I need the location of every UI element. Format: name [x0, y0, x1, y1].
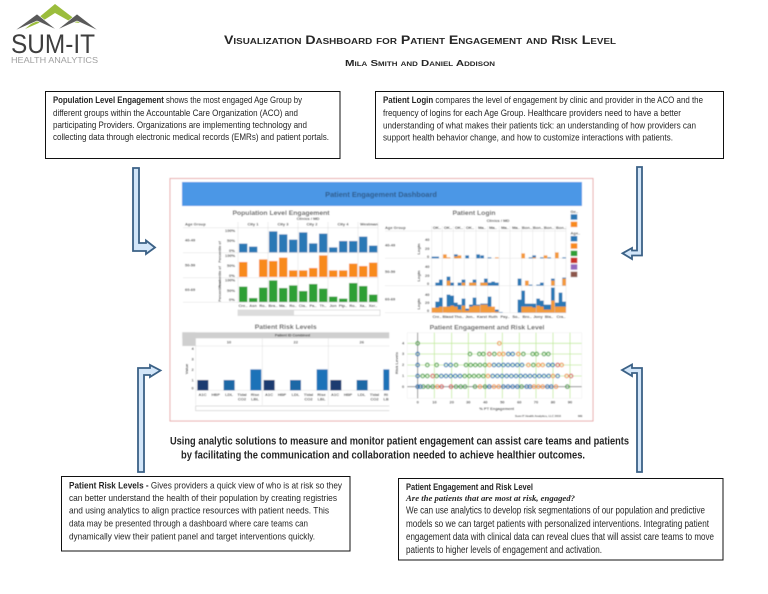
chart: patient risk levels: 22 [293, 340, 299, 345]
chart: patient risk levels: Rise [317, 392, 326, 397]
chart: patient engagement and risk level scatter: 70 [534, 400, 539, 404]
chart: patient engagement and risk level scatter: 80 [551, 400, 556, 404]
chart: patient login: Bon.. [556, 225, 566, 230]
chart: patient login: 0 [427, 281, 430, 286]
chart: patient risk levels: HBP [211, 392, 220, 397]
dashboard header banner [182, 182, 582, 206]
chart: population level engagement: Ma.. [279, 303, 287, 308]
chart: population level engagement: Cre.. [239, 303, 247, 308]
chart: population level engagement: Ro.. [289, 303, 297, 308]
legend: gender and age group: Age.. [570, 230, 580, 236]
panel: patient risk levels text: can better understand the health of their population by creating registries [69, 493, 337, 503]
panel: patient login text: support health behavior change, and how to customize interactions with patients. [383, 132, 673, 142]
chart: patient login: Karst [477, 314, 488, 319]
chart: patient login: 40 [425, 237, 430, 242]
chart: patient engagement and risk level scatter [394, 324, 582, 418]
chart: patient engagement and risk level scatter: 40 [483, 400, 488, 404]
chart: population level engagement: Pa.. [309, 303, 317, 308]
chart: patient login: 0 [427, 308, 430, 313]
chart: patient login: Bla.. [545, 314, 553, 319]
chart: patient login: 20 [425, 300, 430, 305]
callout: central statement: Using analytic solutions to measure and monitor patient engagement can assist care teams and patients [170, 436, 629, 448]
panel: patient login text [376, 92, 724, 158]
chart: patient risk levels: A1C [331, 392, 339, 397]
chart: population level engagement: Bra.. [269, 303, 277, 308]
chart: patient risk levels: A1C [265, 392, 273, 397]
chart: patient login: Clinics / MD [487, 218, 509, 223]
chart: population level engagement: 0% [229, 248, 235, 253]
chart: patient login: Bon.. [544, 225, 554, 230]
chart: patient login: Tho.. [454, 314, 464, 319]
chart: population level engagement: Xer.. [369, 303, 377, 308]
chart: patient login: OK.. [455, 225, 463, 230]
chart: patient engagement and risk level scatter: 2 [402, 362, 405, 367]
panel: patient engagement and risk level text [398, 478, 723, 560]
chart: patient engagement and risk level scatter: MB [578, 414, 582, 418]
chart: patient risk levels: CO2 [304, 396, 313, 402]
panel: patient risk levels text [62, 476, 350, 551]
chart: population level engagement: Jon [329, 303, 337, 308]
legend: gender and age group: Ge.. [570, 209, 578, 214]
chart: population level engagement: City 2 [307, 222, 318, 226]
chart: patient login: So.. [512, 314, 520, 319]
callout: central statement: by facilitating the communication and collaboration needed to achieve healthier outcomes. [181, 450, 585, 462]
chart: patient engagement and risk level scatter: 50 [500, 400, 505, 404]
chart: population level engagement: Pip.. [339, 303, 347, 308]
chart: population level engagement: Cla.. [299, 303, 307, 308]
panel: population level engagement text: different groups within the Accountable Care Organization (ACO) and [53, 108, 298, 118]
chart: population level engagement: 50-59 [185, 262, 196, 268]
chart: patient login: 40-49 [385, 242, 396, 248]
logo: Sum-It Health Analytics: SUM-IT [11, 29, 95, 59]
chart: patient engagement and risk level scatter: 0 [402, 384, 405, 389]
panel: patient engagement and risk level text: Patient Engagement and Risk Level [406, 482, 533, 492]
panel: patient risk levels text: data may be presented through a dashboard where care teams can [69, 518, 308, 528]
chart: patient risk levels: 3 [192, 356, 194, 362]
panel: population level engagement text: collecting data through electronic medical records (EMRs) and patient portals. [53, 132, 329, 142]
logo: Sum-It Health Analytics: HEALTH ANALYTICS [11, 55, 98, 65]
panel: patient risk levels text: dynamically view their patient panel and target interventions quickly. [69, 532, 315, 542]
authors: Mila Smith and Daniel Addison [345, 58, 495, 68]
chart: patient engagement and risk level scatter: Sum-IT Health Analytics, LLC 2016 [515, 414, 561, 418]
chart: population level engagement: City 4 [338, 222, 349, 226]
chart: patient risk levels: Ri [384, 392, 388, 397]
panel: patient engagement and risk level text: We can use analytics to develop risk segmentations of our population and predictive [406, 506, 705, 516]
chart: patient engagement and risk level scatter: 4 [402, 340, 405, 346]
chart: patient risk levels: Tidal [304, 392, 313, 397]
chart: population level engagement: 40-49 [185, 238, 196, 242]
panel: population level engagement text: Population Level Engagement shows the most engaged Age Group by [53, 95, 302, 105]
chart: population level engagement: Age Group [185, 222, 206, 226]
chart: patient risk levels: LDL [225, 392, 233, 397]
chart: population level engagement: 50% [227, 238, 235, 243]
chart: patient risk levels: HBP [344, 392, 353, 397]
chart: patient risk levels: LDL [292, 392, 300, 397]
chart: patient login: Cre.. [433, 314, 441, 319]
chart: patient engagement and risk level scatter: 1 [402, 373, 405, 378]
chart: patient risk levels: LBL [251, 396, 259, 402]
dashboard header banner: Patient Engagement Dashboard [325, 190, 437, 199]
chart: patient engagement and risk level scatter: % PT Engagement [479, 406, 515, 411]
chart: patient login: Ma.. [501, 225, 509, 230]
chart: patient engagement and risk level scatter: 0 [417, 400, 420, 404]
panel: population level engagement text: participating Providers. Organizations are implementing technology and [53, 120, 307, 130]
chart: patient login: 0 [427, 254, 430, 259]
chart: population level engagement: Clinics / MD [297, 216, 319, 221]
chart: patient login: 20 [425, 273, 430, 278]
chart: population level engagement: 100% [225, 253, 236, 258]
chart: patient login: Ma.. [489, 225, 497, 230]
chart: patient risk levels: Patient ID Combined [275, 334, 310, 338]
chart: population level engagement: Asn [249, 303, 257, 308]
chart: population level engagement: Ro.. [259, 303, 267, 308]
chart: patient login: Pay.. [500, 314, 510, 319]
chart: patient login: Jony [533, 314, 543, 319]
chart: patient risk levels: LB [383, 396, 389, 402]
chart: patient login: 60-69 [385, 296, 396, 302]
chart: population level engagement: 100% [225, 228, 236, 233]
arrow: top right [622, 167, 642, 259]
chart: patient risk levels: Tidal [237, 392, 247, 397]
chart: patient risk levels: Tidal [370, 392, 379, 397]
chart: patient risk levels: Patient Risk Levels [255, 324, 317, 331]
chart: patient login: Blasd [443, 314, 454, 319]
chart: patient engagement and risk level scatter: 60 [517, 400, 522, 404]
arrow: bottom right [622, 364, 642, 472]
chart: patient login: Ma.. [512, 225, 520, 230]
chart: population level engagement: Th.. [319, 303, 327, 308]
chart: population level engagement: Percentile of [218, 265, 222, 288]
panel: patient engagement and risk level text: patients to higher levels of engagement and activation. [406, 545, 602, 556]
chart: patient risk levels: HBP [278, 392, 287, 397]
chart: patient login: Bon.. [533, 225, 543, 230]
chart: patient risk levels: 10 [227, 340, 232, 345]
chart: patient engagement and risk level scatter: 3 [402, 351, 405, 356]
chart: patient risk levels: 1 [192, 378, 194, 382]
chart: patient login: Cra.. [557, 314, 565, 319]
panel: population level engagement text [46, 92, 340, 158]
chart: patient risk levels: CO2 [370, 396, 379, 402]
chart: population level engagement: Xa.. [359, 303, 367, 308]
chart: patient risk levels: LDL [358, 392, 366, 397]
chart: population level engagement: Westman [360, 222, 378, 226]
chart: patient login: 40 [425, 292, 430, 297]
chart: patient engagement and risk level scatter: 90 [568, 400, 573, 404]
chart: patient engagement and risk level scatter: 30 [466, 400, 471, 404]
chart: patient login: Jon.. [465, 314, 475, 319]
chart: patient risk levels: LBL [318, 396, 326, 402]
chart: patient engagement and risk level scatter: Risk Levels [394, 351, 399, 374]
chart: patient login: Age Group [385, 225, 406, 230]
chart: patient risk levels: Rise [251, 392, 260, 397]
panel: patient engagement and risk level text: models so we can target patients with personalized interventions. Integrating patient [406, 519, 709, 530]
chart: patient login [385, 210, 566, 319]
chart: population level engagement: Percentile of [218, 240, 222, 263]
panel: patient engagement and risk level text: Are the patients that are most at risk, engaged? [405, 494, 575, 503]
chart: patient login: Login [416, 243, 421, 254]
chart: population level engagement: Ro.. [349, 303, 357, 308]
chart: population level engagement: City 3 [278, 222, 289, 226]
chart: patient engagement and risk level scatter: 20 [449, 400, 455, 404]
chart: patient risk levels: Value [184, 363, 189, 374]
chart: patient login: Patient Login [452, 210, 496, 217]
arrow: bottom left [138, 365, 160, 472]
arrow: top left [133, 168, 155, 254]
panel: patient risk levels text: Patient Risk Levels - Gives providers a quick view of who is at risk so they [69, 480, 342, 490]
callout: central statement [170, 436, 629, 462]
chart: population level engagement: City 1 [248, 222, 259, 226]
chart: patient login: Bro.. [522, 314, 532, 319]
chart: population level engagement: 100% [225, 278, 236, 282]
chart: patient login: Login [416, 270, 421, 281]
chart: patient login: Ruth [488, 314, 498, 319]
chart: patient engagement and risk level scatter: 10 [432, 400, 437, 404]
chart: population level engagement: 0% [229, 273, 235, 278]
chart: population level engagement [183, 210, 380, 316]
chart: patient risk levels: 0 [192, 386, 194, 390]
chart: patient engagement and risk level scatter: Patient Engagement and Risk Level [430, 324, 545, 332]
chart: patient risk levels [182, 324, 394, 411]
title: Visualization Dashboard for Patient Engagement and Risk Level [224, 35, 616, 47]
chart: patient login: Bon.. [522, 225, 532, 230]
chart: population level engagement: Population Level Engagement [232, 210, 330, 217]
chart: patient login: 50-59 [385, 269, 396, 274]
chart: patient login: 20 [425, 246, 430, 251]
chart: patient risk levels: 4 [192, 346, 194, 351]
chart: patient login: Ma.. [478, 225, 486, 230]
panel: patient engagement dashboard [170, 178, 593, 421]
chart: patient login: 40 [425, 264, 430, 269]
chart: patient login: Login [416, 298, 421, 309]
chart: patient login: OK.. [466, 225, 474, 230]
legend: gender and age group [570, 209, 580, 277]
chart: population level engagement: 0% [229, 297, 235, 302]
panel: patient login text: frequency of logins for each Age Group. Healthcare providers need to have a better [383, 108, 681, 118]
chart: patient risk levels: 26 [359, 340, 365, 345]
chart: population level engagement: 50% [227, 263, 235, 268]
chart: patient login: OK.. [433, 225, 441, 230]
chart: patient risk levels: 2 [192, 367, 194, 372]
logo: Sum-It Health Analytics [11, 4, 99, 65]
chart: population level engagement: Percentile of [218, 279, 222, 302]
chart: population level engagement: 50% [227, 288, 235, 293]
chart: patient login: OK.. [444, 225, 452, 230]
chart: patient risk levels: A1C [198, 392, 207, 397]
panel: patient login text: understanding of what makes their patients tick: an understanding of how providers can [383, 120, 696, 130]
chart: patient risk levels: CO2 [238, 396, 247, 402]
panel: patient risk levels text: and using analytics to align practice resources with patient needs. This [69, 506, 329, 516]
chart: population level engagement: 60-69 [185, 287, 196, 292]
panel: patient login text: Patient Login compares the level of engagement by clinic and provider in the ACO and the [383, 95, 703, 105]
